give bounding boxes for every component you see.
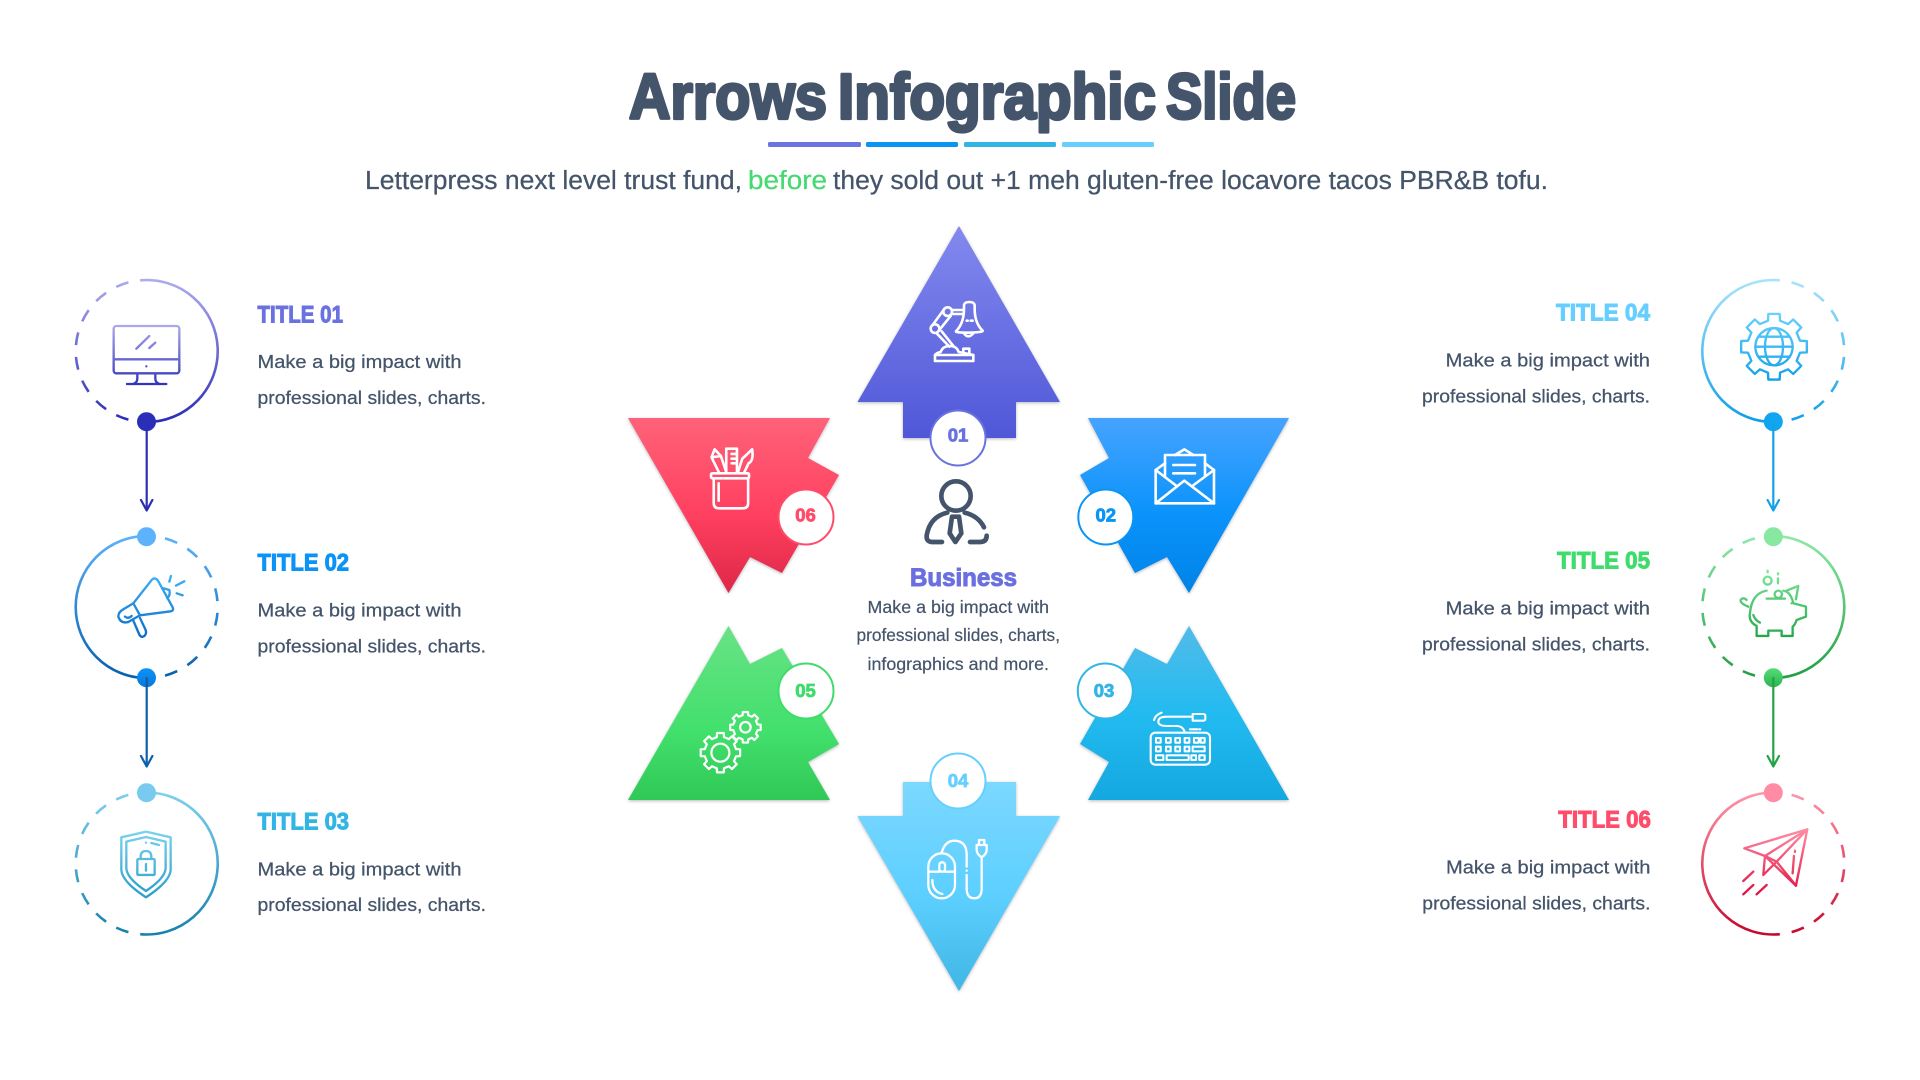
- text 02: Make a big impact with: [258, 600, 462, 620]
- subtitle: they sold out +1 meh gluten-free locavore tacos PBR&B tofu.: [833, 167, 1548, 195]
- icon: globe gear: [1741, 314, 1807, 380]
- icon: keyboard: [1151, 713, 1210, 765]
- icon ring 04: [1702, 280, 1844, 431]
- text 02: [258, 600, 486, 656]
- text 03: professional slides, charts.: [258, 894, 486, 915]
- icon ring 06: [1702, 783, 1844, 935]
- panel: arrow 05: [628, 626, 839, 800]
- text 01: Make a big impact with: [258, 351, 462, 372]
- text 01: professional slides, charts.: [258, 387, 486, 408]
- icon: gears: [701, 712, 761, 772]
- title 04: TITLE 04: [1556, 300, 1651, 327]
- panel: center business: [856, 481, 1060, 674]
- subtitle: [365, 167, 1548, 195]
- arrow shape 04: [858, 782, 1060, 991]
- business description: [856, 597, 1060, 674]
- arrow: 04 to 05: [1768, 422, 1779, 510]
- number badge 02: 02: [1096, 504, 1116, 526]
- icon: paper plane: [1743, 829, 1807, 894]
- text 03: [258, 858, 486, 915]
- text 03: Make a big impact with: [258, 858, 462, 880]
- icon: piggy bank: [1741, 571, 1806, 636]
- panel: step 06: [1422, 783, 1844, 935]
- number badge 05: 05: [795, 680, 816, 701]
- number badge 03: [1078, 664, 1133, 718]
- panel: arrow 01: [858, 226, 1060, 466]
- icon ring 01: [76, 280, 218, 431]
- title 06: TITLE 06: [1558, 807, 1651, 834]
- text 01: [258, 351, 486, 408]
- panel: arrow 03: [1078, 626, 1289, 800]
- icon: business person: [927, 481, 987, 542]
- subtitle: before: [748, 167, 827, 195]
- panel: arrow 04: [858, 754, 1060, 991]
- arrow shape 05: [628, 626, 839, 800]
- business description: infographics and more.: [868, 654, 1049, 674]
- panel: arrow 06: [628, 418, 839, 593]
- icon ring 02: [76, 527, 218, 687]
- panel: step 05: [1422, 527, 1844, 687]
- title 05: TITLE 05: [1557, 548, 1650, 575]
- icon ring 05: [1702, 527, 1844, 687]
- number badge 06: [778, 490, 834, 544]
- business description: Make a big impact with: [868, 597, 1049, 617]
- title: Slide: [1166, 60, 1296, 132]
- panel: step 04: [1422, 280, 1844, 431]
- number badge 01: [930, 410, 986, 466]
- subtitle: Letterpress next level trust fund,: [365, 167, 742, 195]
- panel: step 01: [76, 280, 486, 431]
- title: [629, 60, 1296, 132]
- text 05: professional slides, charts.: [1422, 634, 1650, 654]
- text 04: [1422, 350, 1650, 406]
- icon: shield lock: [121, 832, 171, 897]
- icon: pencil cup: [711, 449, 753, 508]
- text 02: professional slides, charts.: [258, 636, 486, 656]
- number badge 04: [930, 754, 986, 808]
- arrow shape 01: [858, 226, 1060, 438]
- icon: envelope: [1156, 449, 1214, 503]
- panel: arrow 02: [1078, 418, 1289, 593]
- business description: professional slides, charts,: [856, 625, 1060, 645]
- title 03: TITLE 03: [258, 808, 349, 836]
- text 05: [1422, 598, 1650, 654]
- title 01: TITLE 01: [258, 301, 343, 328]
- icon: mouse: [928, 840, 987, 898]
- text 06: Make a big impact with: [1446, 856, 1650, 877]
- number badge 02: [1078, 490, 1133, 544]
- arrow shape 02: [1080, 418, 1289, 593]
- title: Arrows: [629, 60, 827, 132]
- arrow shape 06: [628, 418, 839, 593]
- arrow shape 03: [1080, 626, 1289, 800]
- icon: megaphone: [118, 576, 184, 637]
- text 06: professional slides, charts.: [1422, 892, 1650, 913]
- icon: desk lamp: [931, 302, 983, 361]
- text 06: [1422, 856, 1650, 913]
- text 05: Make a big impact with: [1446, 598, 1650, 618]
- icon: monitor: [114, 326, 179, 384]
- text 04: professional slides, charts.: [1422, 386, 1650, 406]
- icon ring 03: [76, 783, 218, 934]
- title: Infographic: [838, 60, 1156, 132]
- panel: step 03: [76, 783, 486, 934]
- title 02: TITLE 02: [258, 550, 349, 577]
- number badge 05: [778, 664, 834, 718]
- arrow: 02 to 03: [141, 678, 152, 766]
- number badge 01: 01: [948, 424, 968, 446]
- number badge 03: 03: [1094, 680, 1114, 701]
- number badge 06: 06: [795, 504, 816, 526]
- panel: step 02: [76, 527, 486, 687]
- arrow: 01 to 02: [141, 422, 152, 510]
- business heading: Business: [910, 564, 1017, 592]
- arrow: 05 to 06: [1768, 678, 1779, 766]
- title underline bars: [768, 142, 1154, 147]
- number badge 04: 04: [948, 770, 969, 791]
- text 04: Make a big impact with: [1446, 350, 1650, 370]
